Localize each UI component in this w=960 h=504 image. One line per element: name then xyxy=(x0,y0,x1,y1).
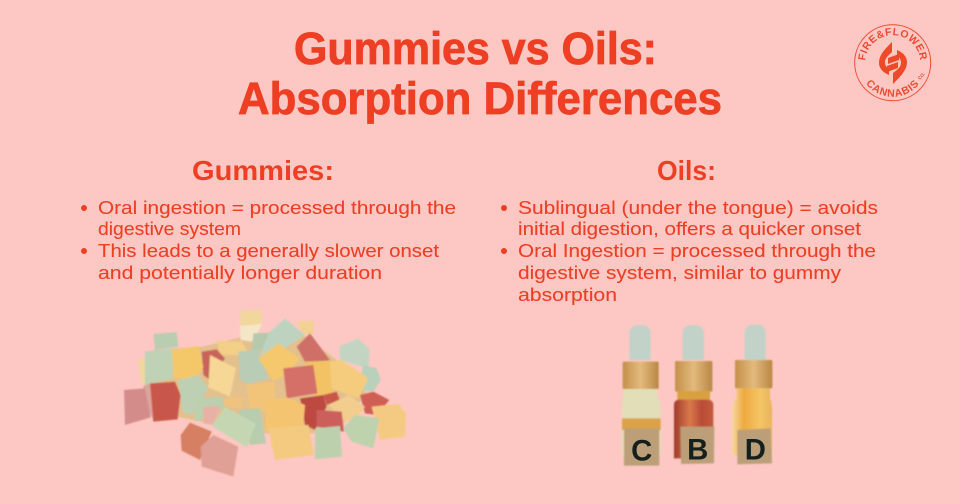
bullet list: oils: absorption xyxy=(518,284,617,305)
bottle D xyxy=(732,324,772,464)
bullet list: gummies: Oral ingestion = processed through the xyxy=(98,197,456,218)
bottle B xyxy=(674,325,714,464)
image: pile of gummy cubes xyxy=(124,310,406,477)
logo: Fire & Flower Cannabis Co.: CANNABIS xyxy=(867,80,918,97)
title xyxy=(238,23,722,124)
title: Gummies vs Oils: xyxy=(294,23,657,74)
bullet list: gummies: and potentially longer duration xyxy=(98,262,382,283)
bottle block letters: D xyxy=(745,433,766,466)
bottle block letters xyxy=(631,433,766,467)
logo: Fire & Flower Cannabis Co.: FIRE&FLOWER xyxy=(858,28,927,60)
logo: Fire & Flower Cannabis Co. xyxy=(854,24,932,102)
image: three CBD oil bottles xyxy=(622,324,772,467)
bullet list: oils: digestive system, similar to gummy xyxy=(518,262,842,283)
bullet list: gummies xyxy=(81,197,456,283)
bullet list: oils: Sublingual (under the tongue) = avoids xyxy=(518,197,878,218)
bullet list: oils: Oral Ingestion = processed through the xyxy=(518,240,876,261)
bullet list: gummies: digestive system xyxy=(98,218,241,239)
bottle block letters: C xyxy=(631,434,652,467)
panel: gummies text xyxy=(81,155,456,283)
bullet list: gummies: This leads to a generally slower onset xyxy=(98,240,439,261)
heading: Gummies: Gummies: xyxy=(192,155,334,186)
title: Absorption Differences xyxy=(238,73,722,124)
bottle block letters: B xyxy=(687,433,708,466)
heading: Oils: Oils: xyxy=(657,155,716,186)
bullet list: oils: initial digestion, offers a quicker onset xyxy=(518,218,861,239)
bullet list: oils xyxy=(501,197,878,305)
bottle C xyxy=(622,325,661,466)
logo: Fire & Flower Cannabis Co.: CO. xyxy=(917,71,926,81)
panel: oils text xyxy=(501,155,878,305)
